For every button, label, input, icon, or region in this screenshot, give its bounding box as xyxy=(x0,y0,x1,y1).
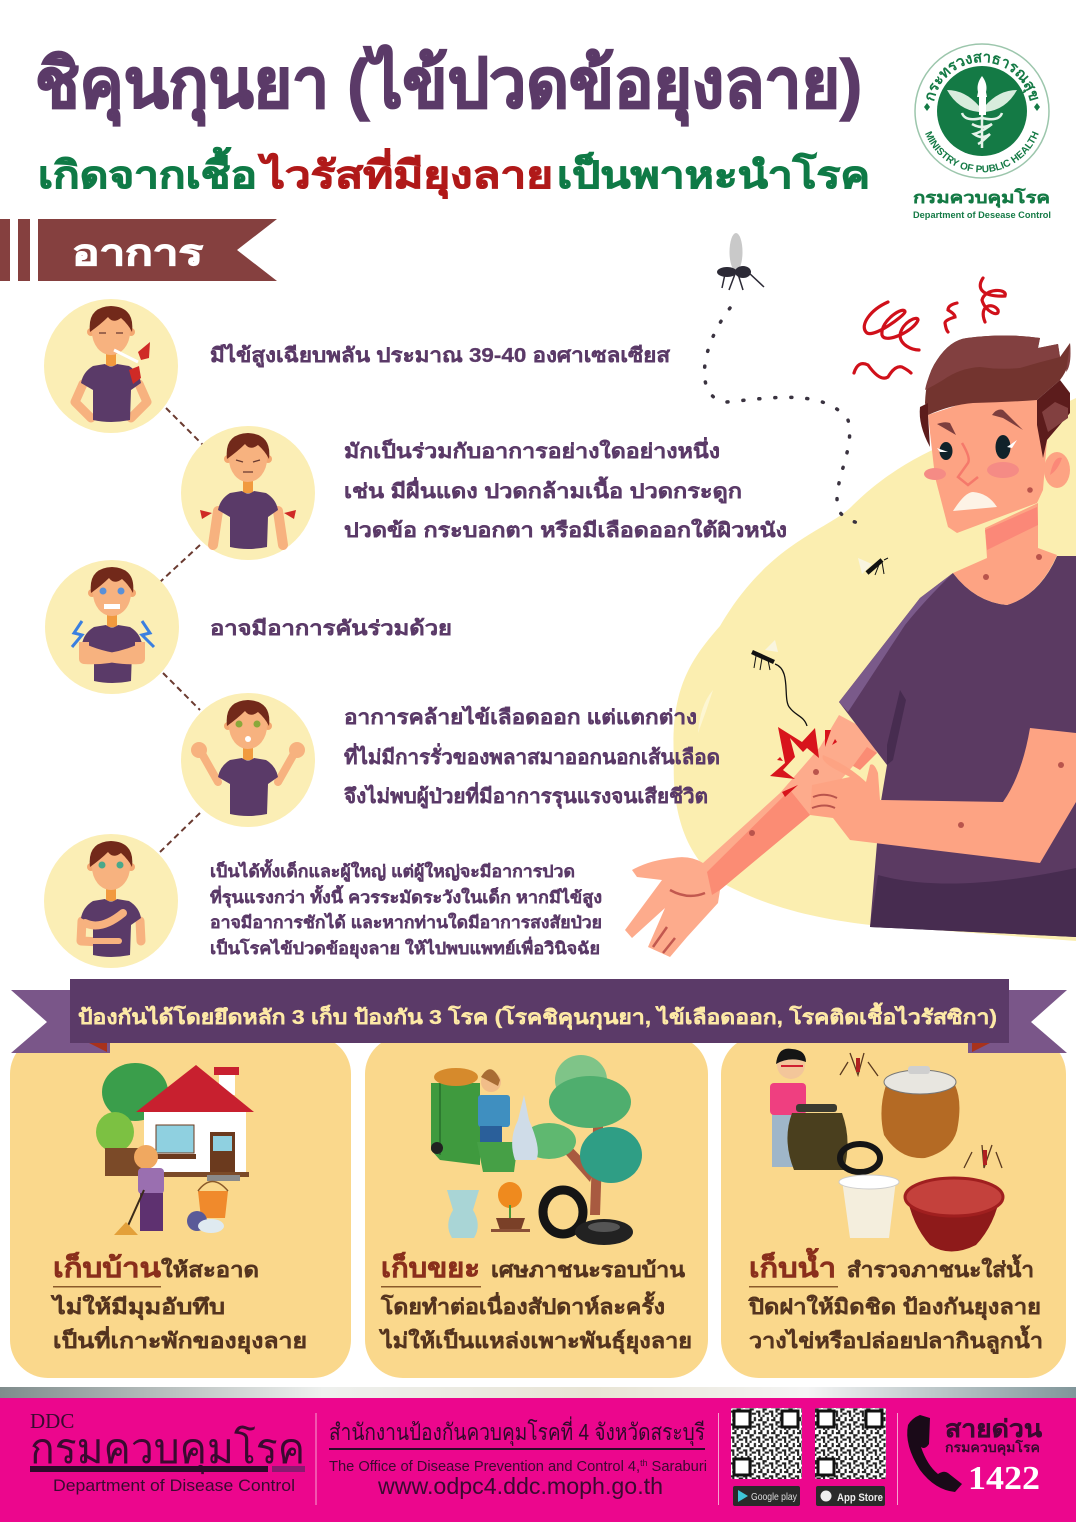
logo: Ministry of Public Health: MINISTRY OF PUBLIC HEALTH xyxy=(925,131,1039,172)
footer: hotline: 1422 xyxy=(968,1460,1040,1497)
symptom text 2: มักเป็นร่วมกับอาการอย่างใดอย่างหนึ่ง xyxy=(344,436,720,463)
symptom text 5 xyxy=(210,859,602,959)
department name under logo: Department of Desease Control xyxy=(913,210,1051,220)
panel: manage waste xyxy=(365,1036,708,1378)
footer: hotline: กรมควบคุมโรค xyxy=(945,1439,1040,1456)
footer: department logo: กรมควบคุมโรค xyxy=(30,1424,305,1475)
illustration: flight path dots xyxy=(704,308,868,525)
text: เก็บขยะ xyxy=(381,1250,480,1283)
symptom text 2: ปวดข้อ กระบอกตา หรือมีเลือดออกใต้ผิวหนัง xyxy=(344,518,787,542)
ear xyxy=(1044,452,1070,488)
illustration: man scratching xyxy=(625,336,1076,957)
mouth xyxy=(953,492,997,511)
symptom 2 icon xyxy=(181,426,315,560)
panel: keep house clean: ให้สะอาด xyxy=(161,1257,259,1282)
symptom 4 icon xyxy=(181,693,315,827)
illustration: water containers xyxy=(770,1049,1003,1252)
icon: mosquito top xyxy=(717,233,764,290)
footer: office details: The Office of Disease Prevention and Control 4, xyxy=(329,1458,647,1475)
symptom 5 icon xyxy=(44,834,178,968)
icon: red dizzy scribbles xyxy=(854,278,1005,378)
icon: telephone xyxy=(907,1415,962,1492)
department name under logo xyxy=(913,187,1051,220)
nose xyxy=(958,443,978,485)
footer: department logo: Department of Disease Control xyxy=(53,1476,295,1495)
eyes and brows xyxy=(940,442,952,460)
footer: department logo: DDC xyxy=(30,1409,74,1433)
text: เก็บน้ำ xyxy=(749,1247,836,1283)
heading: prevention ribbon: ป้องกันได้โดยยึดหลัก 3 เก็บ ป้องกัน 3 โรค (โรคชิคุนกุนยา, ไข้เลือดออก, โรคติดเชื้อไวรัสซิกา) xyxy=(78,1002,997,1030)
sleeve highlight xyxy=(839,573,953,712)
heading: symptoms banner: อาการ xyxy=(72,232,204,273)
symptom text 5: ที่รุนแรงกว่า ทั้งนี้ ควรระมัดระวังในเด็ก หากมีไข้สูง xyxy=(210,885,602,909)
icon: mosquito with squiggle xyxy=(752,640,807,726)
panel: manage water xyxy=(721,1036,1066,1378)
hair xyxy=(925,336,1070,415)
footer: department logo xyxy=(30,1409,305,1495)
text: เก็บบ้าน xyxy=(53,1250,162,1283)
neck xyxy=(953,503,1057,605)
footer: office details xyxy=(329,1416,707,1499)
panel: keep house clean xyxy=(10,1036,351,1378)
footer xyxy=(0,1387,1076,1522)
footer: QR code 1 xyxy=(731,1408,802,1506)
footer: office details: สำนักงานป้องกันควบคุมโรคที่ 4 จังหวัดสระบุรี xyxy=(329,1416,705,1446)
panel: keep house clean: เป็นที่เกาะพักของยุงลาย xyxy=(53,1325,307,1355)
subtitle: ไวรัสที่มียุงลาย xyxy=(257,148,553,199)
panel: manage water: ปิดฝาให้มิดชิด ป้องกันยุงลาย xyxy=(747,1294,1041,1321)
footer: QR code 2: App Store xyxy=(837,1492,883,1504)
footer: office details: www.odpc4.ddc.moph.go.th xyxy=(377,1473,663,1499)
logo: Ministry of Public Health: กระทรวงสาธารณสุข xyxy=(926,52,1038,101)
symptom text 4: จึงไม่พบผู้ป่วยที่มีอาการรุนแรงจนเสียชีวิต xyxy=(344,781,708,810)
footer: office details: Saraburi xyxy=(647,1458,707,1475)
panel: manage waste: โดยทำต่อเนื่องสัปดาห์ละครั้ง xyxy=(380,1291,665,1319)
symptom 3 icon xyxy=(45,560,179,694)
icon: mosquito near neck xyxy=(858,558,888,575)
illustration: waste bins and containers xyxy=(431,1055,642,1245)
heading: symptoms banner xyxy=(0,219,277,281)
symptom text 3: อาจมีอาการคันร่วมด้วย xyxy=(210,617,452,640)
footer: QR code 2 xyxy=(815,1408,886,1506)
logo: Ministry of Public Health xyxy=(914,43,1050,179)
subtitle: เป็นพาหะนำโรค xyxy=(557,152,870,197)
panel: manage waste: เศษภาชนะรอบบ้าน xyxy=(491,1258,686,1282)
symptom text 4: ที่ไม่มีการรั่วของพลาสมาออกนอกเส้นเลือด xyxy=(344,742,720,769)
symptom 1 icon xyxy=(44,299,178,433)
panel: manage water: สำรวจภาชนะใส่น้ำ xyxy=(847,1254,1034,1282)
symptom text 4 xyxy=(344,705,720,810)
symptom text 2: เช่น มีผื่นแดง ปวดกล้ามเนื้อ ปวดกระดูก xyxy=(344,476,742,505)
shirt hem xyxy=(870,868,1076,937)
panel: manage waste: ไม่ให้เป็นแหล่งเพาะพันธุ์ยุงลาย xyxy=(379,1327,692,1355)
symptom text 1: มีไข้สูงเฉียบพลัน ประมาณ 39-40 องศาเซลเซียส xyxy=(210,343,671,369)
subtitle xyxy=(38,147,870,199)
face xyxy=(928,400,1047,533)
far arm xyxy=(625,715,877,957)
illustration: yellow blob xyxy=(673,398,1076,941)
footer: office details: th xyxy=(640,1458,647,1468)
symptom text 5: เป็นได้ทั้งเด็กและผู้ใหญ่ แต่ผู้ใหญ่จะมีอาการปวด xyxy=(210,859,575,883)
panel: manage water: วางไข่หรือปล่อยปลากินลูกน้ำ xyxy=(749,1325,1043,1355)
symptom text 2 xyxy=(344,436,787,542)
shirt xyxy=(839,556,1076,937)
decorative connector lines xyxy=(160,408,203,852)
symptom text 4: อาการคล้ายไข้เลือดออก แต่แตกต่าง xyxy=(344,705,697,729)
footer: hotline: สายด่วน xyxy=(945,1416,1043,1443)
icon: red burst on arm xyxy=(770,727,837,797)
heading: prevention ribbon xyxy=(11,979,1067,1053)
title: ชิคุนกุนยา (ไข้ปวดข้อยุงลาย) xyxy=(35,44,862,126)
illustration: house and sweeper xyxy=(96,1063,254,1235)
symptom text 5: อาจมีอาการชักได้ และหากท่านใดมีอาการสงสัยป่วย xyxy=(210,912,602,932)
department name under logo: กรมควบคุมโรค xyxy=(913,187,1050,208)
panel: keep house clean: ไม่ให้มีมุมอับทึบ xyxy=(51,1294,225,1321)
footer: hotline xyxy=(945,1416,1043,1497)
near arm and scratching hand xyxy=(810,728,1076,863)
subtitle: เกิดจากเชื้อ xyxy=(38,147,257,197)
footer: QR code 1: Google play xyxy=(751,1492,797,1503)
symptom text 5: เป็นโรคไข้ปวดข้อยุงลาย ให้ไปพบแพทย์เพื่อวินิจฉัย xyxy=(210,936,600,959)
